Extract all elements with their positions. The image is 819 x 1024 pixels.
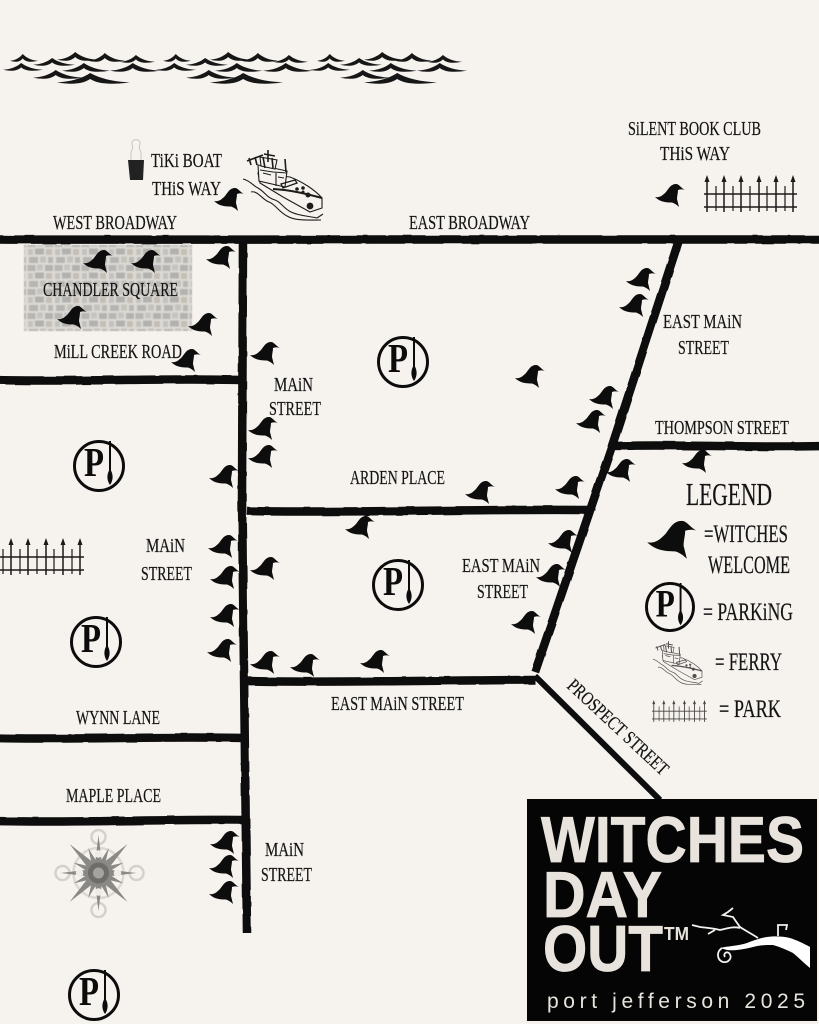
street labels: STREET xyxy=(141,563,192,585)
street labels: EAST MAiN STREET xyxy=(331,693,464,715)
legend label: park: = PARK xyxy=(719,696,781,723)
logo title xyxy=(541,803,804,985)
legend label: ferry: = FERRY xyxy=(715,649,782,676)
street labels: WYNN LANE xyxy=(76,707,160,729)
callout: silent book club xyxy=(628,118,761,165)
parking markers xyxy=(70,335,428,1020)
icon: compass rose xyxy=(56,830,144,917)
street labels: MiLL CREEK ROAD xyxy=(54,341,182,363)
icon: bare tree branch xyxy=(692,908,810,968)
icon: park fence top right xyxy=(704,175,797,212)
street labels: MAiN xyxy=(265,839,304,861)
street labels: MAiN xyxy=(274,374,313,396)
street labels: STREET xyxy=(269,398,321,420)
street labels: EAST BROADWAY xyxy=(409,212,530,234)
logo title: TM xyxy=(664,924,689,944)
legend xyxy=(646,476,793,723)
witch hat markers xyxy=(57,184,712,904)
street labels: PROSPECT STREET xyxy=(563,675,673,780)
street labels: STREET xyxy=(261,864,312,886)
legend label: witches welcome xyxy=(704,521,790,579)
icon: ferry boat xyxy=(243,150,323,220)
callout: tiki boat: THiS WAY xyxy=(152,178,221,200)
icon: park fence left xyxy=(0,538,84,575)
callout: silent book club: THiS WAY xyxy=(660,143,730,165)
legend title: LEGEND xyxy=(686,476,772,512)
callout: silent book club: SiLENT BOOK CLUB xyxy=(628,118,761,140)
street labels: EAST MAiN xyxy=(462,555,540,577)
legend icon: witch hat xyxy=(647,521,697,559)
logo title: OUT xyxy=(543,912,663,985)
street labels: EAST MAiN xyxy=(663,311,742,333)
icon: tiki drink xyxy=(128,140,144,180)
street labels: STREET xyxy=(477,581,528,603)
logo subtitle: port jefferson 2025 xyxy=(547,990,805,1013)
logo title: DAY xyxy=(543,858,662,931)
street labels: MAiN xyxy=(146,535,185,557)
roads xyxy=(0,236,819,933)
legend icon: parking xyxy=(646,582,694,631)
callout: tiki boat xyxy=(151,150,222,200)
panel: Chandler Square cobblestones xyxy=(24,245,192,331)
street labels: WEST BROADWAY xyxy=(53,212,177,234)
street labels: ARDEN PLACE xyxy=(350,467,445,489)
street labels xyxy=(53,212,789,886)
street labels: MAPLE PLACE xyxy=(66,785,161,807)
callout: tiki boat: TiKi BOAT xyxy=(151,150,222,172)
street labels: STREET xyxy=(678,337,729,359)
legend icon: ferry xyxy=(653,641,703,685)
panel: Witches Day Out logo xyxy=(527,799,817,1021)
label: Chandler Square: CHANDLER SQUARE xyxy=(43,279,178,301)
legend icon: park fence xyxy=(652,700,707,722)
waves xyxy=(3,52,467,84)
